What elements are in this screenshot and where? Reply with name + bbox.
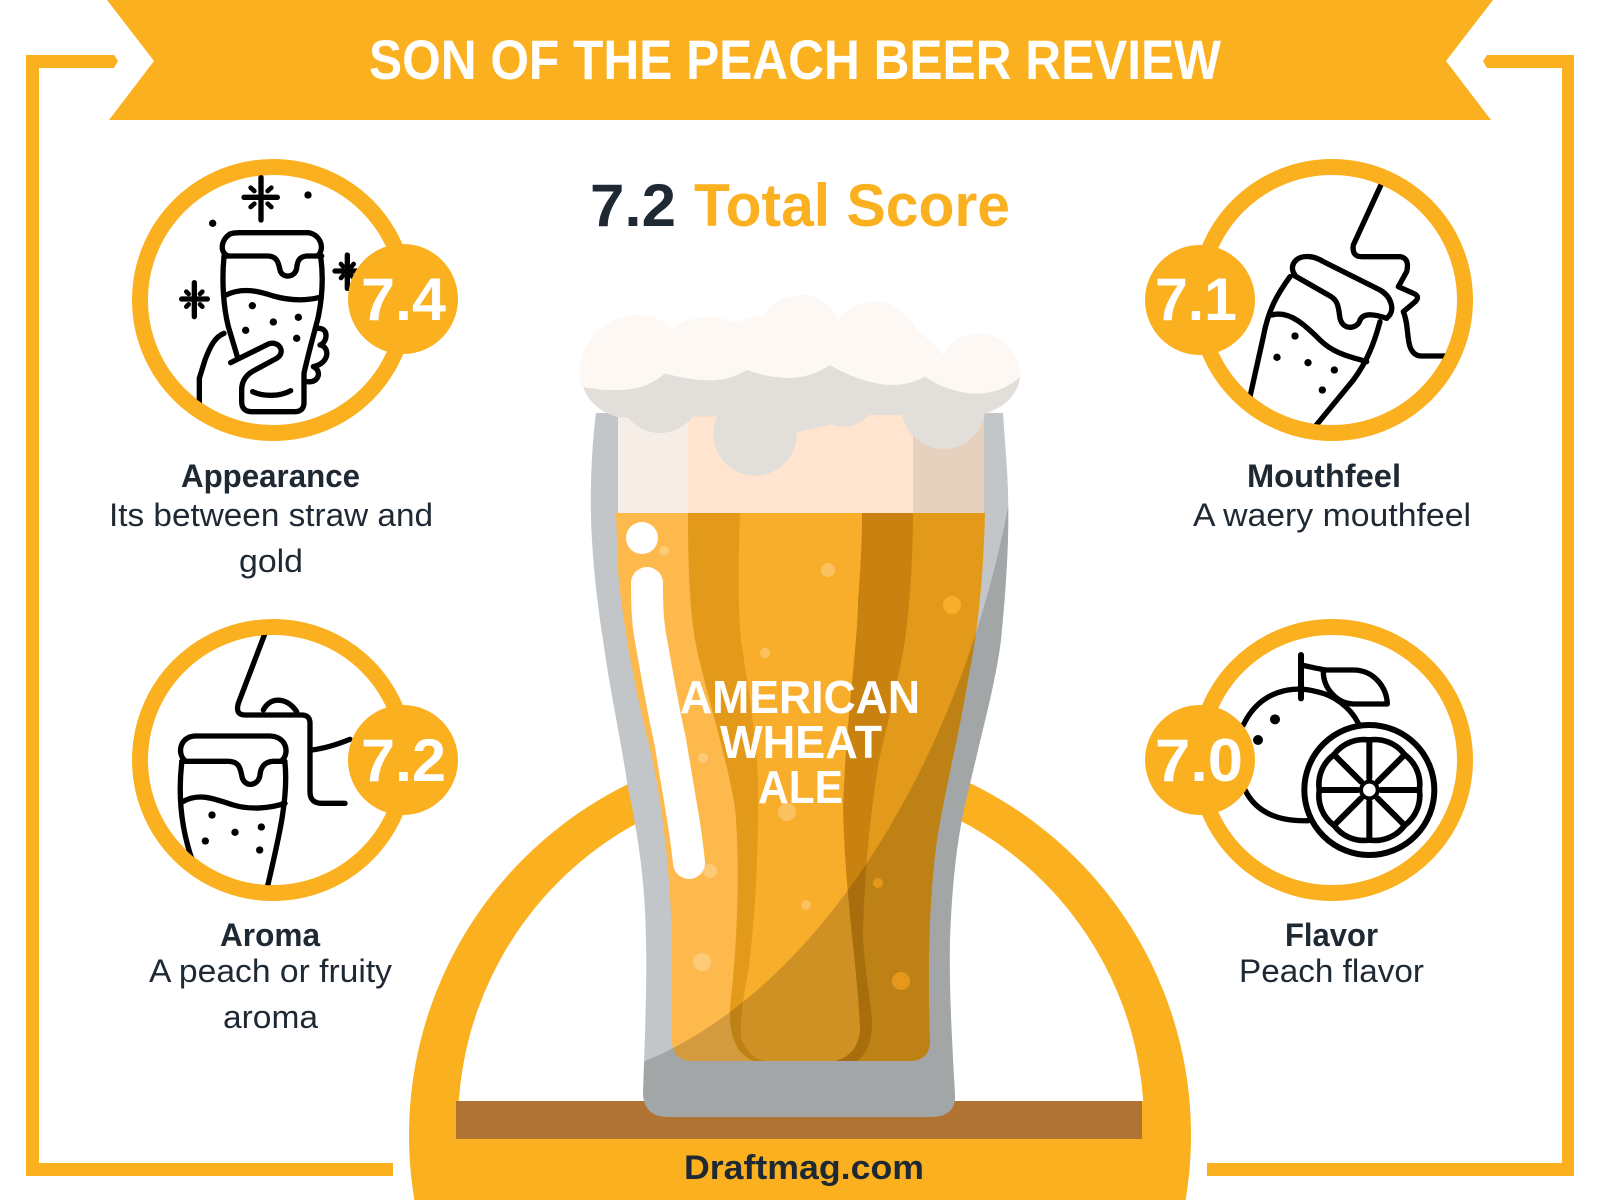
aroma ring [140,627,406,893]
wooden table [456,1101,1142,1139]
appearance text: Its between straw and [109,497,433,533]
empty glass tint [618,400,984,513]
mouthfeel ring [1199,167,1465,433]
glass label: AMERICAN [680,671,920,723]
aroma text: A peach or fruity [149,953,392,989]
beer glass [580,295,1020,1125]
mouthfeel text: Mouthfeel [1247,458,1401,494]
panel: aroma [140,627,458,1035]
icon: face drinking beer [1250,183,1445,427]
glass body [591,413,1008,1117]
mouthfeel score badge [1145,245,1255,355]
appearance text: gold [239,543,303,579]
title banner [107,0,1493,120]
aroma score badge [348,705,458,815]
mouthfeel text: A waery mouthfeel [1193,497,1471,533]
icon: hand holding beer glass [182,177,358,412]
total score heading: Total Score [694,172,1010,239]
aroma score badge: 7.2 [361,727,446,794]
glass highlight [626,522,689,863]
glass label: WHEAT [720,716,882,768]
foam shadow [581,350,1020,476]
icon: peach and slice [1243,655,1434,855]
panel: appearance [109,167,458,579]
icon: nose smelling beer [180,633,350,890]
aroma text: Aroma [220,917,320,953]
appearance text [109,458,433,579]
flavor text: Flavor [1285,917,1378,953]
mouthfeel score badge: 7.1 [1155,266,1237,333]
beer liquid [610,513,1000,1063]
appearance text: Appearance [181,458,360,494]
flavor text: Peach flavor [1239,953,1424,989]
flavor ring [1199,627,1465,893]
appearance ring [140,167,406,433]
mouthfeel text [1193,458,1471,533]
panel: mouthfeel [1145,167,1471,533]
flavor text [1239,917,1424,989]
bubbles [659,546,961,990]
foam top [580,295,1020,394]
appearance score badge: 7.4 [361,266,447,333]
glass label: ALE [758,761,843,813]
panel: flavor [1145,627,1465,989]
aroma text: aroma [223,999,318,1035]
source credit: Draftmag.com [684,1149,924,1187]
flavor score badge: 7.0 [1155,727,1243,794]
glass label [680,671,920,813]
glass shadow [630,507,1020,1125]
appearance score badge [348,244,458,354]
total score heading: 7.2 [590,172,676,239]
flavor score badge [1145,705,1255,815]
aroma text [149,917,392,1035]
title banner: SON OF THE PEACH BEER REVIEW [369,28,1221,91]
orange arch behind glass [409,744,1191,1200]
